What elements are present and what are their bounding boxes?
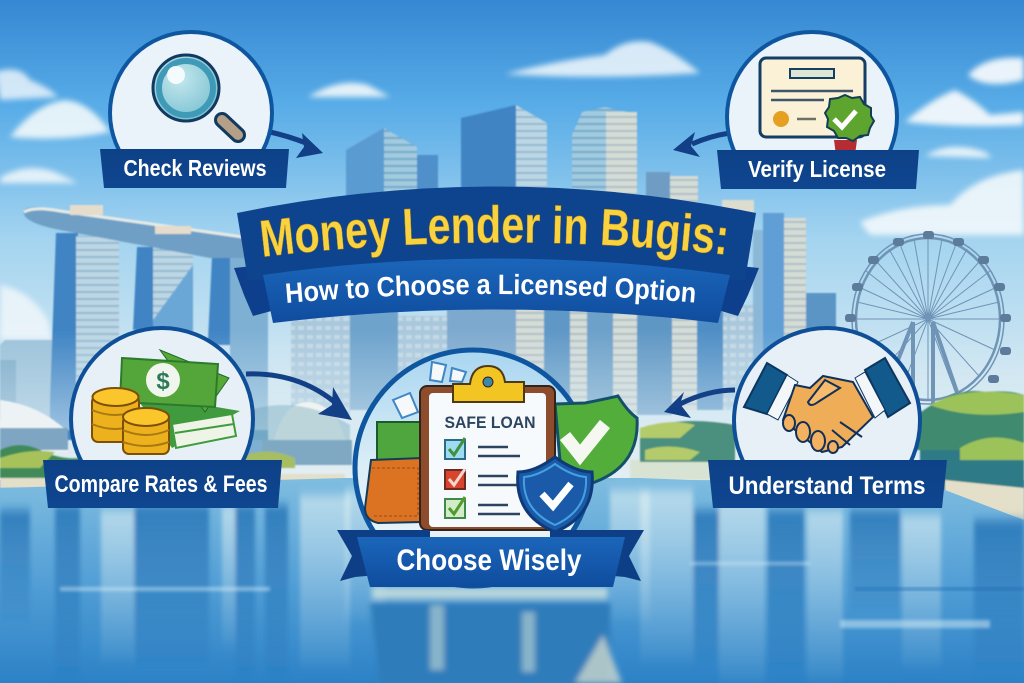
- arrow: reviews to centre: [270, 132, 323, 158]
- banner: check reviews: [100, 149, 289, 188]
- icon: handshake: [744, 358, 910, 453]
- panel: verify license: [717, 32, 919, 202]
- tower group centre back: [346, 105, 754, 240]
- icon: cash: [377, 422, 421, 462]
- icon: book: [140, 400, 240, 448]
- panel: compare rates and fees: [43, 328, 282, 510]
- marina bay sands: [24, 205, 268, 458]
- circle: understand terms: [732, 326, 922, 460]
- banner: verify license: [717, 150, 919, 189]
- banner: compare rates and fees: Compare Rates & Fees: [54, 471, 268, 498]
- circle: compare rates: [69, 326, 255, 460]
- circle: check reviews: [108, 30, 274, 149]
- building reflections: [0, 490, 1024, 683]
- banner: understand terms: [708, 460, 947, 508]
- background: sky: [0, 0, 1024, 480]
- arrow: license to centre: [673, 132, 730, 157]
- waterfront: domes, trees, shore: [0, 391, 1024, 520]
- tower group behind title: [291, 213, 836, 416]
- panel: understand terms: [708, 328, 947, 514]
- arrow: terms to centre: [664, 390, 735, 418]
- icon: certificate: [760, 58, 874, 157]
- banner: compare rates and fees: [43, 460, 282, 508]
- icon: blue shield: [518, 457, 592, 532]
- panel: choose wisely: [337, 350, 644, 587]
- water: [0, 478, 1024, 683]
- icon: cash: $: [156, 368, 170, 395]
- circle: central: [355, 350, 591, 586]
- banner: understand terms: Understand Terms: [728, 472, 926, 500]
- icon: cash: [120, 350, 229, 412]
- skyline: [0, 105, 1024, 458]
- banner: choose wisely: Choose Wisely: [396, 544, 582, 577]
- icon: clipboard: SAFE LOAN: [444, 413, 536, 432]
- icon: clipboard: [420, 366, 555, 530]
- haze over base of skyline: [0, 330, 1024, 430]
- icon: magnifying glass: [153, 55, 238, 135]
- icon: wallet: [365, 458, 422, 523]
- icon: green shield: [555, 396, 637, 495]
- distant left buildings: [0, 340, 70, 420]
- title heading: Money Lender in Bugis:: [260, 204, 726, 260]
- checklist: [445, 438, 520, 518]
- arrow: rates to centre: [246, 374, 352, 420]
- panel: check reviews: [100, 32, 289, 194]
- banner: verify license: Verify License: [748, 156, 886, 182]
- ferris wheel: [845, 231, 1011, 405]
- banner: choose wisely: [337, 530, 644, 587]
- central reflection: [370, 587, 622, 683]
- icon: coins: [92, 388, 169, 454]
- arrows: [246, 132, 735, 420]
- clouds: [0, 41, 1024, 340]
- icon: papers: [393, 362, 466, 418]
- title banner: [234, 186, 759, 364]
- circle: verify license: [725, 30, 899, 150]
- subtitle: How to Choose a Licensed Option: [286, 274, 695, 304]
- banner: check reviews: Check Reviews: [124, 155, 266, 181]
